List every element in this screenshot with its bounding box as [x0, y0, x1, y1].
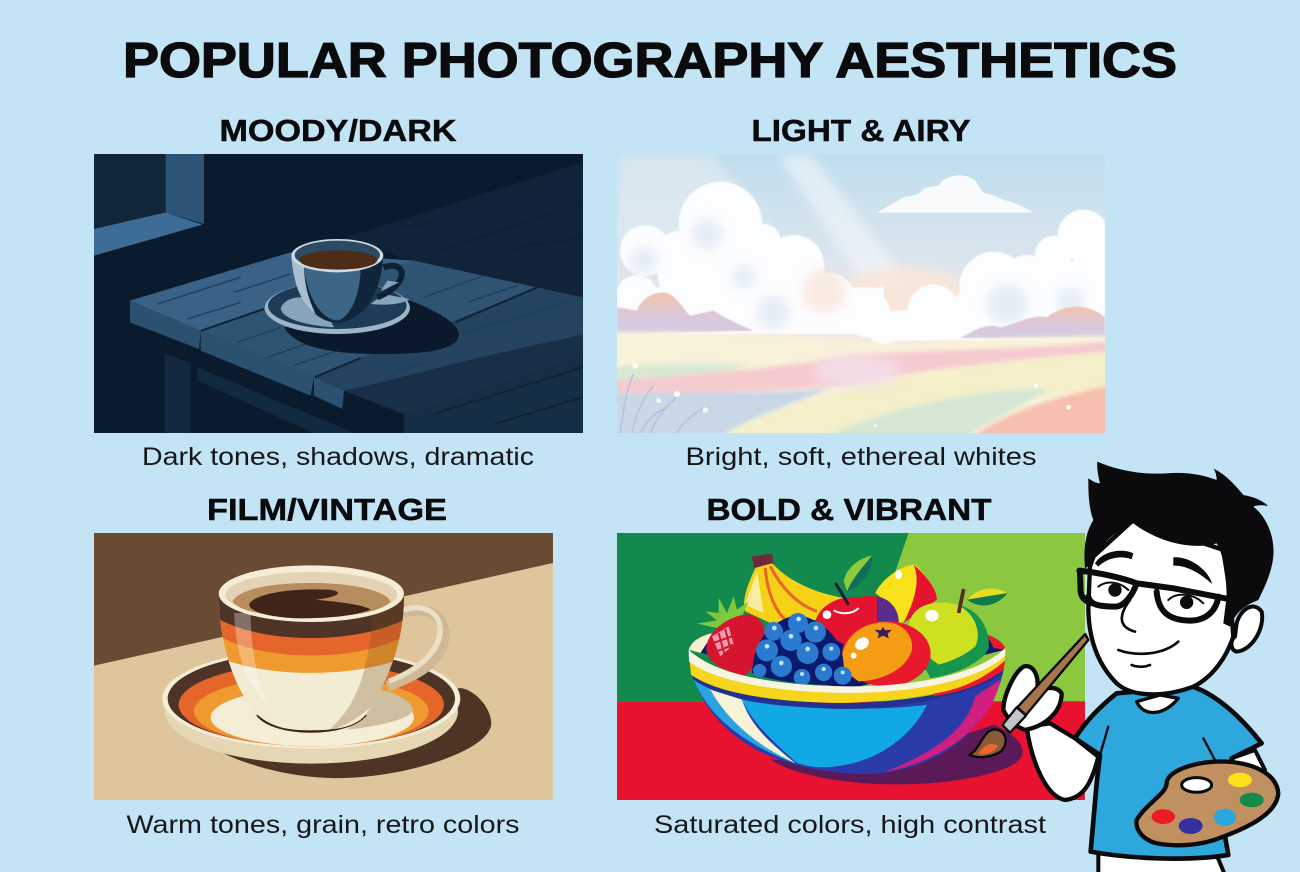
- distant clouds: [617, 292, 1105, 338]
- pear: [875, 565, 937, 623]
- right arm: [1232, 750, 1265, 780]
- saucer: [265, 282, 410, 334]
- cup: [291, 239, 402, 323]
- blueberries: [752, 613, 857, 686]
- hair: [1084, 462, 1274, 627]
- cup shadow: [284, 301, 459, 354]
- cup body: [214, 565, 411, 731]
- pants: [1098, 853, 1225, 872]
- glasses: [1079, 571, 1228, 621]
- heading: film/vintage: FILM/VINTAGE: [207, 492, 447, 527]
- arm and hand: [1003, 666, 1098, 800]
- bowl: [689, 648, 1005, 774]
- panel: light and airy landscape: [610, 154, 1120, 441]
- field: [610, 332, 1114, 441]
- strawberry: [697, 596, 766, 676]
- t-shirt: [1075, 687, 1262, 859]
- bowl interior: [689, 632, 1005, 690]
- palette: [1136, 761, 1278, 845]
- rim and coffee: [219, 565, 404, 622]
- saucer: [162, 649, 460, 764]
- green apple: [909, 588, 1008, 678]
- caption: film/vintage: Warm tones, grain, retro colors: [126, 811, 520, 839]
- heading: bold and vibrant: BOLD & VIBRANT: [706, 492, 992, 527]
- table planks: [130, 252, 583, 433]
- paintbrush: [969, 634, 1088, 757]
- collar: [1137, 695, 1178, 713]
- panel: bold and vibrant fruit bowl: [617, 533, 1085, 800]
- nose and mouth: [1118, 600, 1178, 667]
- heading: moody/dark: MOODY/DARK: [220, 113, 457, 148]
- red apple: [815, 556, 899, 648]
- heading: light and airy: LIGHT & AIRY: [752, 113, 971, 148]
- orange: [842, 621, 931, 686]
- title: POPULAR PHOTOGRAPHY AESTHETICS: [123, 34, 1177, 88]
- panel: film/vintage coffee cup: [94, 533, 553, 800]
- eyes: [1098, 583, 1203, 609]
- grass and flowers: [620, 363, 1071, 433]
- caption: bold and vibrant: Saturated colors, high contrast: [654, 811, 1046, 839]
- banana: [744, 554, 844, 625]
- caption: moody/dark: Dark tones, shadows, dramatic: [142, 443, 534, 471]
- bowl shadow: [770, 725, 1023, 784]
- caption: light and airy: Bright, soft, ethereal whites: [686, 443, 1036, 471]
- ear: [1231, 607, 1262, 652]
- panel: moody/dark coffee cup on table: [94, 154, 583, 433]
- eyebrows: [1095, 551, 1212, 584]
- shadow: [197, 688, 491, 778]
- face: [1088, 520, 1233, 694]
- character: painter with brush and palette: [969, 462, 1278, 872]
- small top cloud: [876, 175, 1034, 213]
- handle: [387, 608, 444, 686]
- clouds: [616, 182, 1120, 345]
